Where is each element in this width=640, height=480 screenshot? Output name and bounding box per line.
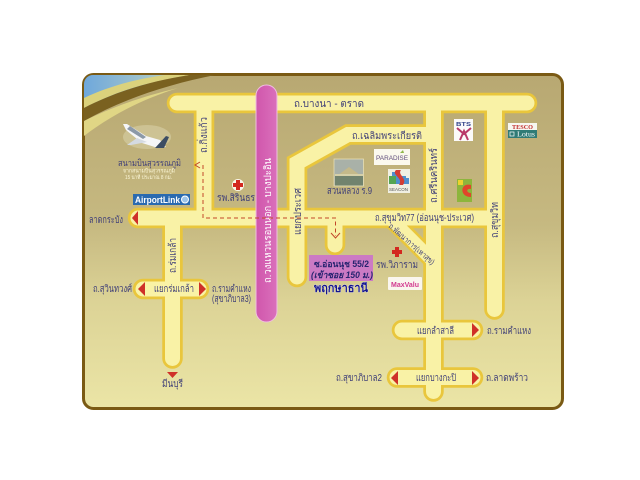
road: outer ring (pink): ถ.วงแหวนรอบนอก - บางปะอิน: [263, 158, 274, 283]
logo: Tesco Lotus: [508, 123, 537, 138]
road: outer ring (pink): [256, 85, 277, 322]
logo: MaxValu: MaxValu: [391, 280, 419, 289]
label: Ramkhamhaeng east: ถ.รามคำแหง: [487, 326, 531, 337]
label: Lat Phrao: ถ.ลาดพร้าว: [486, 372, 528, 384]
photo: Suan Luang R.9: [334, 159, 364, 186]
label: Suwinthawong: ถ.สุวินทวงศ์: [93, 283, 132, 295]
label: Prawet junction: แยกประเวศ: [293, 187, 304, 235]
label: Suvarnabhumi airport: จากสนามบินสุวรรณภูมิ: [123, 168, 175, 174]
logo: Tesco Lotus: TESCO: [512, 125, 533, 131]
label: Chaloem Phrakiat: ถ.เฉลิมพระเกียรติ: [352, 130, 422, 142]
label: Sirindhorn hospital: รพ.สิรินธร: [217, 193, 256, 204]
logo: Seacon: SEACON: [389, 187, 408, 192]
logo: Paradise: [374, 149, 410, 165]
label: Ramkhamhaeng Sukhaphiban 3: [212, 284, 251, 305]
label: Lam Sali junction: แยกลำสาลี: [417, 325, 454, 337]
label: Suvarnabhumi airport: [118, 158, 181, 181]
logo: Big C: [457, 179, 472, 202]
logo: MaxValu: [388, 277, 422, 290]
label: Sukhaphiban 2: ถ.สุขาภิบาล2: [336, 373, 382, 384]
label: Rom Klao road: ถ.ร่มเกล้า: [167, 238, 179, 273]
label: Suan Luang R.9: สวนหลวง ร.9: [327, 186, 372, 197]
label: Ramkhamhaeng Sukhaphiban 3: ถ.รามคำแหง: [212, 284, 251, 295]
logo: Airport Link: AirportLink: [135, 195, 181, 206]
label: Sukhumvit: ถ.สุขุมวิท: [490, 202, 501, 238]
icon: airplane: [123, 124, 171, 149]
icon: hospital cross Sirindhorn: [232, 179, 244, 191]
callout: soi On Nut 55/2: [309, 255, 373, 281]
panel: map background: [84, 74, 562, 408]
label: Phatthanakan: ถ.พัฒนาการ(เหาสุข): [387, 222, 437, 267]
logo: BTS: [454, 119, 473, 141]
label: Kingkaew: ถ.กิ่งแก้ว: [196, 117, 210, 153]
callout: soi On Nut 55/2: (เข้าซอย 150 ม.): [311, 270, 373, 280]
label: Suvarnabhumi airport: 15 นาที ประมาณ 8 กม.: [125, 174, 172, 181]
label: Rom Klao junction: แยกร่มเกล้า: [154, 283, 194, 295]
label: Lat Krabang: ลาดกระบัง: [89, 215, 123, 226]
icon: hospital cross Wiphaaram: [392, 247, 402, 257]
label: Suvarnabhumi airport: สนามบินสุวรรณภูมิ: [118, 158, 181, 169]
label: Srinakarin: ถ.ศรีนครินทร์: [428, 147, 440, 203]
logo: Seacon: [388, 169, 410, 193]
label: Bang Kapi junction: แยกบางกะปิ: [416, 373, 456, 384]
dashed route: [195, 162, 340, 238]
label: Bangna-Trat: ถ.บางนา - ตราด: [294, 99, 364, 110]
label: Min Buri: มีนบุรี: [162, 378, 184, 390]
label: Pruksa Thani: พฤกษาธานี: [314, 281, 369, 295]
logo: Tesco Lotus: Lotus: [517, 130, 535, 138]
label: Wiphaaram hospital: รพ.วิภาราม: [376, 260, 418, 271]
callout: soi On Nut 55/2: ซ.อ่อนนุช 55/2: [314, 259, 369, 270]
logo: BTS: BTS: [456, 122, 471, 128]
logo: Paradise: PARADISE: [376, 155, 409, 162]
red arrows: [132, 211, 479, 385]
road network: [138, 103, 527, 392]
label: Ramkhamhaeng Sukhaphiban 3: (สุขาภิบาล3): [212, 294, 251, 305]
label: Sukhumvit 77: ถ.สุขุมวิท77 (อ่อนนุช-ประเวศ): [375, 213, 474, 224]
